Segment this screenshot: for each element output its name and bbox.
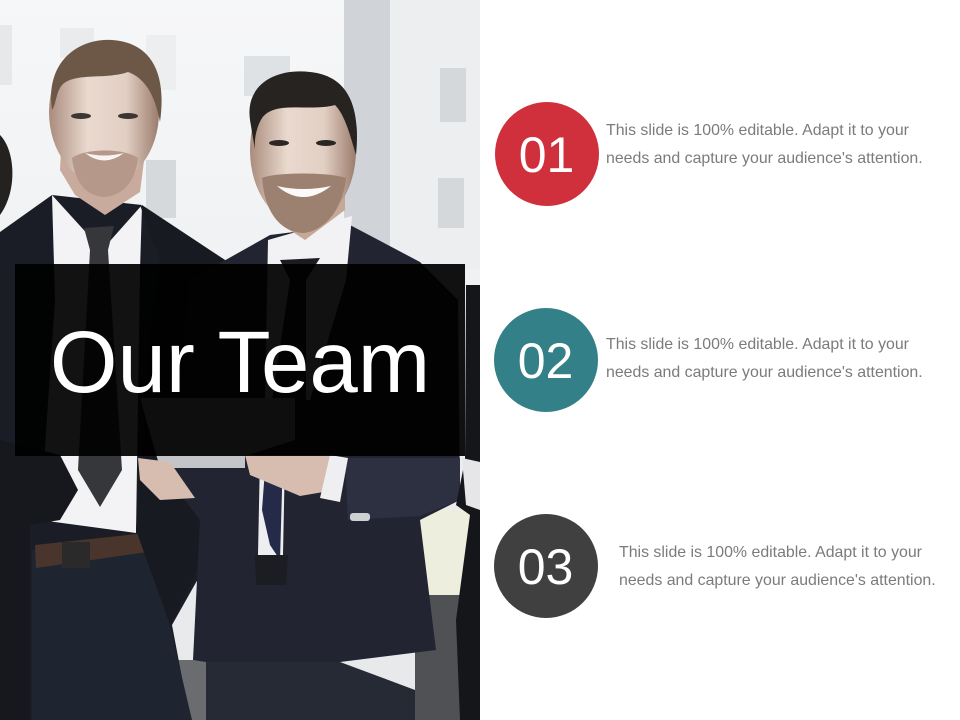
side figures: [0, 135, 480, 720]
text 01: [606, 122, 923, 167]
left man: [0, 40, 232, 720]
title banner: [15, 264, 465, 456]
number badge 01: 01: [519, 127, 574, 183]
right man: [138, 71, 460, 720]
text 02: This slide is 100% editable. Adapt it to your: [606, 336, 909, 353]
text 03: needs and capture your audience's attention.: [619, 572, 936, 589]
number badge 02: [494, 308, 598, 412]
number badge 02: 02: [518, 333, 573, 389]
text 01: needs and capture your audience's attention.: [606, 150, 923, 167]
number badge 01: [495, 102, 599, 206]
item 03: [494, 514, 936, 618]
text 02: [606, 336, 923, 381]
text 03: [619, 544, 936, 589]
number badge 03: [494, 514, 598, 618]
number badge 03: 03: [518, 539, 573, 595]
text 03: This slide is 100% editable. Adapt it to your: [619, 544, 922, 561]
office background: [0, 0, 480, 720]
text 02: needs and capture your audience's attention.: [606, 364, 923, 381]
title: Our Team: [50, 314, 430, 411]
item 01: [495, 102, 923, 206]
item 02: [494, 308, 923, 412]
photo: team of businessmen: [0, 0, 480, 720]
text 01: This slide is 100% editable. Adapt it to your: [606, 122, 909, 139]
